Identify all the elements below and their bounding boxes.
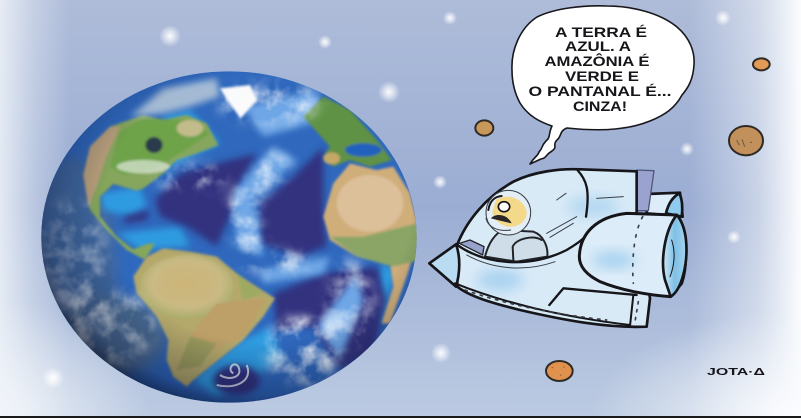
signature: JOTA·Δ (707, 367, 765, 378)
speech text: O PANTANAL É... (528, 83, 672, 99)
Africa (323, 163, 420, 323)
bottom border (0, 416, 801, 418)
ocean (41, 71, 417, 403)
main engine (579, 213, 686, 297)
North America (83, 115, 218, 260)
hull highlights (477, 269, 523, 291)
South America (133, 248, 275, 387)
hull plating strip (455, 283, 633, 326)
hull (457, 169, 650, 327)
speech text: CINZA! (573, 98, 627, 114)
cloud swirl (217, 364, 248, 386)
engine lens (663, 215, 686, 297)
nose cone (429, 244, 459, 287)
speech text: A TERRA É (555, 24, 647, 40)
cloud texture (42, 77, 382, 389)
speech text: AZUL. A (565, 38, 631, 54)
seat (459, 240, 484, 255)
speech text (528, 24, 672, 114)
tail fin (635, 170, 654, 211)
navy deep-ocean patches (123, 147, 387, 395)
limb shading (41, 74, 416, 403)
hatch line (549, 288, 637, 305)
speech bubble (512, 6, 694, 164)
Europe (303, 97, 392, 167)
canopy seam (577, 170, 588, 217)
stars (42, 10, 741, 389)
helmet (486, 190, 531, 235)
torso (485, 230, 547, 262)
canopy base (457, 238, 583, 262)
speech text: VERDE E (565, 68, 639, 84)
Greenland (220, 85, 257, 118)
mid-ocean pale current (233, 90, 363, 360)
pacific shading (41, 154, 120, 354)
shallow bright water (100, 110, 395, 397)
rear engine (647, 193, 683, 217)
face (493, 197, 527, 227)
speech text: AMAZÔNIA É (544, 52, 650, 69)
astronaut (485, 190, 547, 262)
spaceship (429, 169, 686, 327)
Arctic islands (130, 78, 220, 117)
asteroids (475, 58, 770, 381)
globe: Earth (41, 71, 417, 403)
